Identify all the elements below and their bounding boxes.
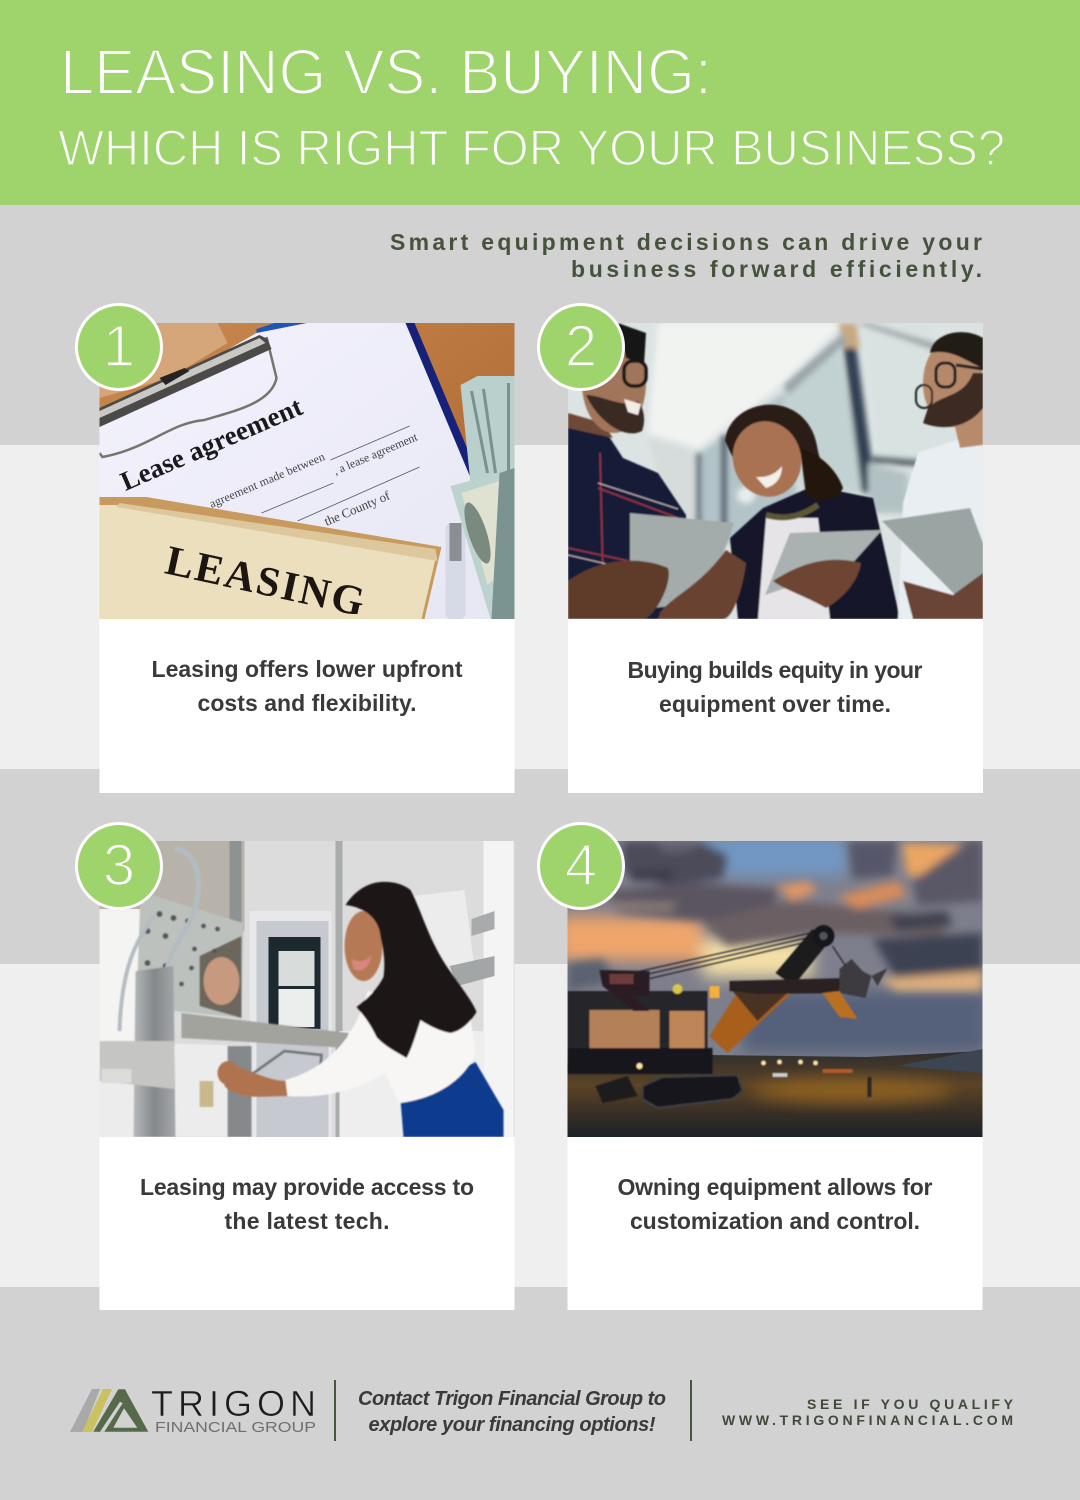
footer website xyxy=(722,1396,1014,1428)
caption 1: costs and flexibility. xyxy=(198,690,416,716)
photo: lease agreement: the County of xyxy=(322,487,393,529)
left man xyxy=(568,423,686,619)
logo: Trigon Financial Group xyxy=(70,1383,316,1436)
number badge 3: 3 xyxy=(103,833,135,898)
photo: lease agreement: LEASING xyxy=(161,538,369,626)
caption 2: equipment over time. xyxy=(659,691,891,717)
footer website: WWW.TRIGONFINANCIAL.COM xyxy=(722,1412,1013,1428)
number badge 1 xyxy=(76,304,162,390)
footer website: SEE IF YOU QUALIFY xyxy=(807,1396,1014,1412)
number badge 1: 1 xyxy=(103,314,135,379)
caption 1: Leasing offers lower upfront xyxy=(152,656,463,682)
card 3 xyxy=(100,841,514,1310)
title: LEASING VS. BUYING: xyxy=(60,36,712,108)
caption 3: the latest tech. xyxy=(224,1208,390,1234)
caption 2: Buying builds equity in your xyxy=(628,657,923,683)
caption 4 xyxy=(618,1174,933,1234)
photo: lease agreement xyxy=(100,323,514,626)
footer call to action: explore your financing options! xyxy=(368,1414,656,1436)
machine body xyxy=(568,991,708,1053)
photo: lease agreement: , a lease agreement xyxy=(331,429,420,478)
tablets xyxy=(630,513,734,610)
card 2 xyxy=(568,323,983,793)
woman xyxy=(730,486,900,619)
card 4 xyxy=(558,836,988,1310)
caption 3 xyxy=(140,1174,474,1234)
caption 4: customization and control. xyxy=(630,1208,920,1234)
woman xyxy=(218,882,504,1137)
footer call to action xyxy=(358,1388,666,1436)
number badge 2 xyxy=(538,304,624,390)
rig xyxy=(100,849,348,1137)
card 1 xyxy=(100,323,514,793)
photo: team with tablets xyxy=(568,323,983,619)
header banner xyxy=(0,0,1080,205)
divider xyxy=(334,1380,336,1441)
logo: Trigon Financial Group: FINANCIAL GROUP xyxy=(155,1419,316,1436)
photo: lease agreement: agreement made between xyxy=(207,449,327,511)
number badge 2: 2 xyxy=(565,314,597,379)
intro text xyxy=(390,229,982,282)
intro text: business forward efficiently. xyxy=(571,256,982,282)
photo: mining excavator at sunset xyxy=(558,836,988,1137)
number badge 3 xyxy=(76,824,162,908)
caption 3: Leasing may provide access to xyxy=(140,1174,474,1200)
intro text: Smart equipment decisions can drive your xyxy=(390,229,982,255)
caption 2 xyxy=(628,657,923,717)
hands xyxy=(568,561,669,619)
footer call to action: Contact Trigon Financial Group to xyxy=(358,1388,666,1410)
right man xyxy=(898,431,983,619)
logo: Trigon Financial Group: TRIGON xyxy=(151,1383,316,1424)
number badge 4: 4 xyxy=(565,833,597,898)
photo: woman with lab equipment xyxy=(100,841,514,1137)
number badge 4 xyxy=(538,824,624,908)
divider xyxy=(690,1380,692,1441)
caption 4: Owning equipment allows for xyxy=(618,1174,933,1200)
caption 1 xyxy=(152,656,463,716)
subtitle: WHICH IS RIGHT FOR YOUR BUSINESS? xyxy=(58,120,1005,176)
photo: lease agreement: Lease agreement xyxy=(116,391,307,497)
